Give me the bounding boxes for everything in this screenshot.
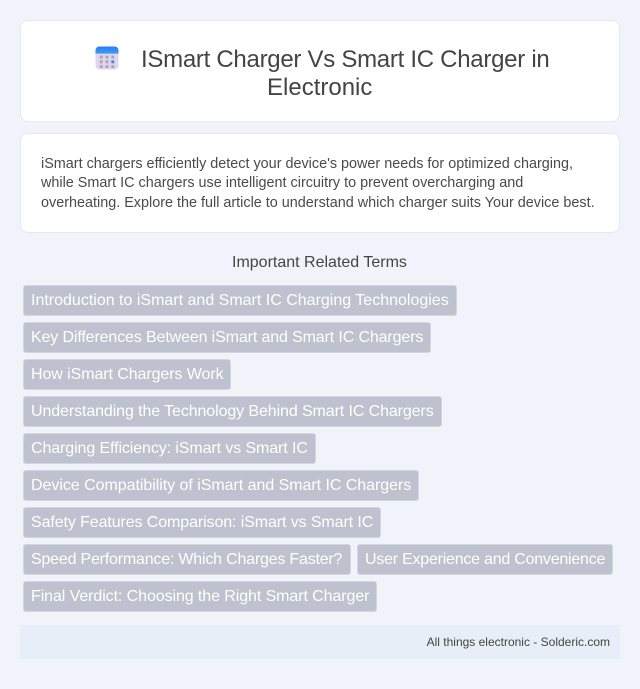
tag 6: Device Compatibility of iSmart and Smart IC Chargers <box>31 477 411 494</box>
tag 8: Speed Performance: Which Charges Faster? <box>31 551 342 568</box>
tag 3: How iSmart Chargers Work <box>31 366 224 383</box>
footer credit: All things electronic - Solderic.com <box>427 635 610 649</box>
tag 6 <box>23 470 419 501</box>
panel: related terms tags <box>23 285 613 612</box>
tag 10: Final Verdict: Choosing the Right Smart Charger <box>31 588 369 605</box>
tag 2 <box>23 322 431 353</box>
text block: summary: while Smart IC chargers use intelligent circuitry to prevent overcharging and <box>41 175 523 191</box>
text block: summary: iSmart chargers efficiently detect your device's power needs for optimized charging, <box>41 156 573 172</box>
text block: summary: overheating. Explore the full article to understand which charger suits Your device best. <box>41 195 595 211</box>
panel: summary card <box>20 133 620 233</box>
tag 3 <box>23 359 231 390</box>
title: Electronic <box>267 74 372 101</box>
heading: important related terms: Important Related Terms <box>232 254 407 271</box>
tag 1 <box>23 285 457 316</box>
title <box>141 46 549 101</box>
tag 10 <box>23 581 377 612</box>
tag 9: User Experience and Convenience <box>365 551 605 568</box>
tag 7: Safety Features Comparison: iSmart vs Smart IC <box>31 514 373 531</box>
tag 1: Introduction to iSmart and Smart IC Charging Technologies <box>31 292 449 309</box>
tag 2: Key Differences Between iSmart and Smart IC Chargers <box>31 329 423 346</box>
text block: summary <box>41 156 595 211</box>
tag 5: Charging Efficiency: iSmart vs Smart IC <box>31 440 308 457</box>
panel: title card <box>20 20 620 122</box>
tag 4: Understanding the Technology Behind Smart IC Chargers <box>31 403 434 420</box>
tag 7 <box>23 507 381 538</box>
tag 8 <box>23 544 351 575</box>
tag 5 <box>23 433 316 464</box>
tag 4 <box>23 396 442 427</box>
tag 9 <box>357 544 613 575</box>
icon: calendar <box>95 46 119 70</box>
footer <box>20 625 620 659</box>
title: ISmart Charger Vs Smart IC Charger in <box>141 46 549 73</box>
